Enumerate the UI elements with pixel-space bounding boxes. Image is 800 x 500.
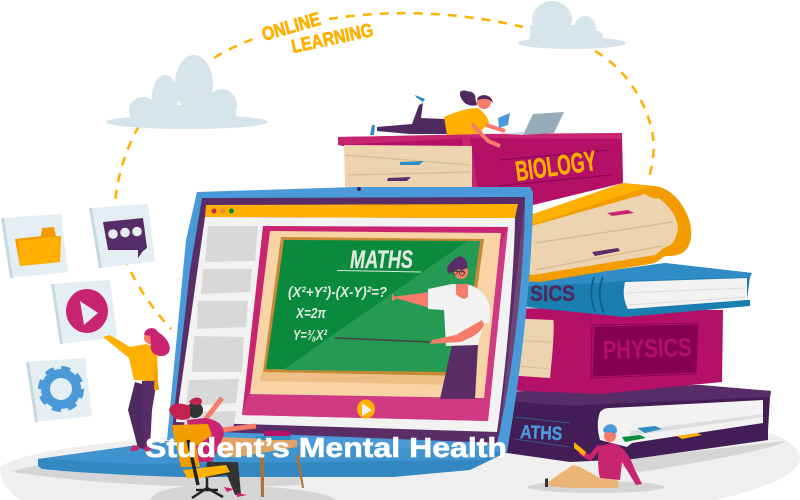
board line and maths text: (X²+Y²)-(X-Y)²=? [288,284,387,301]
floor ellipse [0,433,800,500]
title bar [205,204,518,218]
card: play [51,280,117,344]
book: blue: SICS [530,281,575,306]
card: chat [89,204,155,268]
app screen [176,217,515,432]
person: standing woman [103,328,170,451]
play button [357,400,375,418]
person: reclining woman [370,91,564,146]
video player [242,226,508,421]
card: gear [26,358,92,422]
laptop lid [167,187,533,452]
label: online learning: ONLINE [260,9,323,46]
board line and maths text: Y=⅜X² [293,327,328,344]
book: maths [500,385,771,462]
book: physics: PHYSICS [602,332,692,365]
board line and maths text: MATHS [350,246,413,274]
chair [172,424,212,467]
title: Student’s Mental Health [145,432,507,463]
label: online learning: LEARNING [290,20,375,58]
sidebar [184,226,258,430]
person: teacher [335,256,490,399]
person: seated woman [169,398,256,498]
video frame [250,231,501,398]
cloud right [518,1,626,49]
board line and maths text [288,246,421,344]
cloud left [106,55,268,129]
board line and maths text: X=2π [295,305,326,322]
book: maths: ATHS [520,422,563,445]
app cards [1,204,155,422]
desk with books [220,426,304,497]
dashed learning path [115,13,654,329]
book: amber [510,183,691,282]
book: biology: BIOLOGY [514,145,598,187]
laptop base [38,441,507,477]
card: folder [1,214,68,278]
laptop [38,187,533,477]
book: blue [505,263,752,317]
person: sitting reader [528,424,664,493]
book: biology [338,133,623,205]
chalkboard [263,237,484,376]
label: online learning [260,9,375,58]
book: physics [500,308,723,394]
